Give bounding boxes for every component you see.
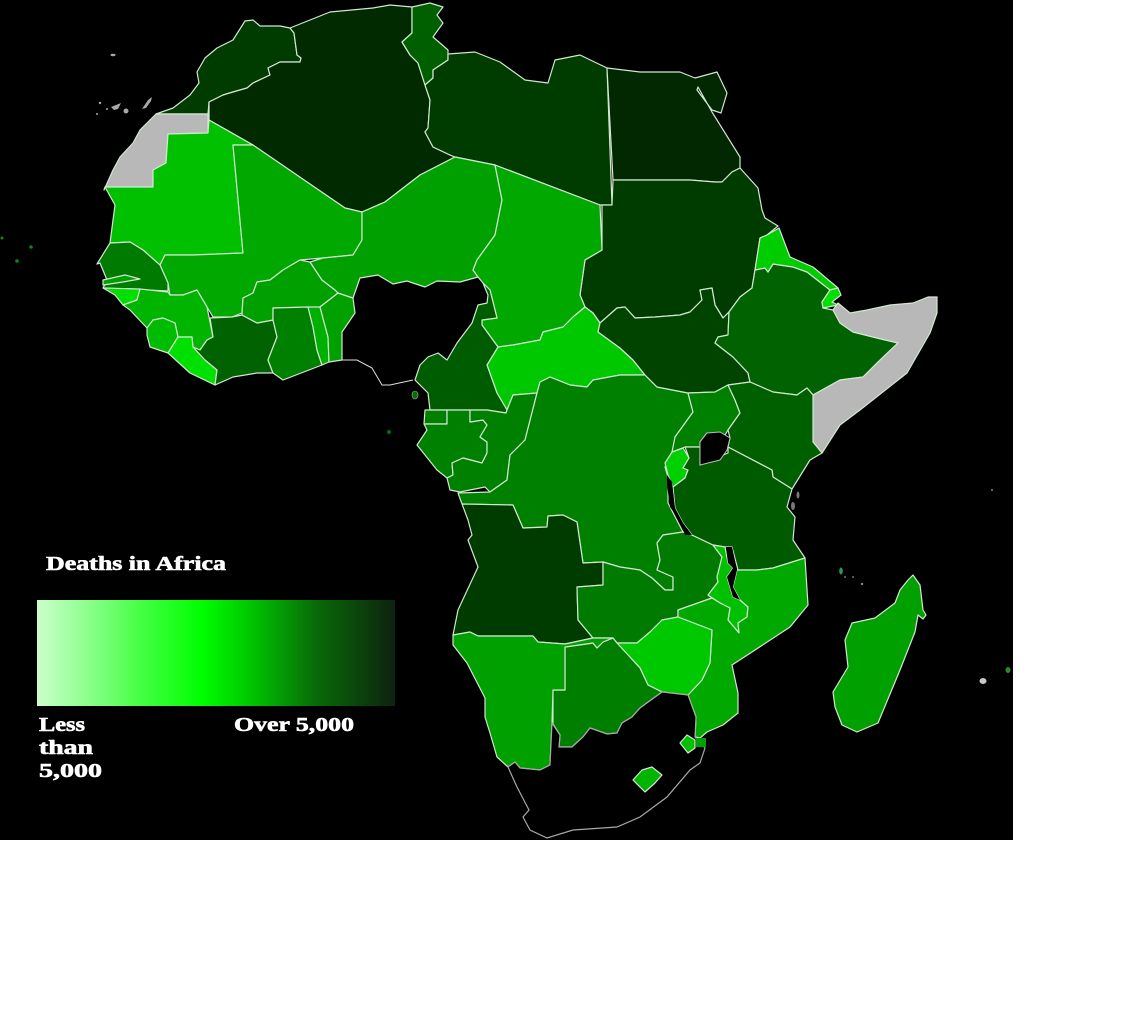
- legend: [37, 553, 395, 782]
- islands: [0, 54, 1010, 684]
- country: Guinea-Bissau: [103, 288, 140, 305]
- country: Lesotho: [633, 767, 662, 792]
- country: Namibia: [453, 632, 613, 770]
- territory: Western Sahara: [104, 114, 208, 190]
- country: Eritrea: [755, 228, 838, 290]
- legend high label: Over 5,000: [234, 714, 354, 736]
- legend low label: 5,000: [39, 760, 102, 782]
- country: Guinea: [123, 289, 213, 350]
- country: Botswana: [553, 638, 662, 747]
- country: South Sudan: [598, 288, 750, 393]
- country: Togo: [308, 307, 329, 365]
- country: Mali: [160, 145, 362, 317]
- country: Morocco: [156, 20, 301, 114]
- country: Senegal: [97, 242, 168, 291]
- country: Uganda: [672, 385, 740, 452]
- country: Sierra Leone: [147, 318, 178, 353]
- country: Swaziland: [680, 735, 695, 753]
- country: Central African Republic: [487, 307, 645, 410]
- country: Cote d'Ivoire: [193, 315, 277, 385]
- country: Somalia: [813, 297, 937, 453]
- country: Cameroon: [415, 283, 507, 413]
- legend title: Deaths in Africa: [46, 553, 226, 575]
- black background panel: [0, 0, 1013, 840]
- country: Niger: [310, 157, 502, 298]
- legend low label: than: [39, 737, 93, 759]
- country: Egypt: [607, 68, 740, 182]
- legend gradient bar: [37, 600, 395, 706]
- country: Sudan: [580, 168, 778, 323]
- country: South Africa: [508, 692, 705, 838]
- country: Republic of the Congo: [447, 393, 537, 492]
- country: Malawi: [708, 545, 748, 633]
- country: Madagascar: [833, 575, 926, 732]
- lake: Victoria: [700, 432, 730, 465]
- country: Benin: [320, 293, 355, 362]
- country: Zambia: [577, 532, 722, 643]
- country: Tunisia: [402, 3, 448, 85]
- country: Equatorial Guinea: [424, 410, 447, 424]
- country: Liberia: [168, 337, 217, 385]
- country: Kenya: [728, 382, 822, 489]
- country: Algeria: [209, 5, 455, 212]
- country: Tanzania: [673, 447, 805, 570]
- country: Ghana: [268, 307, 322, 380]
- lake: Malawi: [726, 547, 740, 600]
- coast: Nigeria: [342, 360, 413, 385]
- country: Libya: [425, 52, 612, 205]
- country: Gabon: [417, 410, 487, 478]
- country: Chad: [473, 165, 602, 347]
- country: Mauritania: [105, 120, 253, 265]
- country: Djibouti: [822, 288, 841, 308]
- Mozambique southern tip: [696, 738, 706, 747]
- country: Gambia: [103, 275, 140, 285]
- country: Democratic Republic of the Congo: [458, 375, 693, 590]
- country: Angola: [453, 504, 603, 644]
- country: Zimbabwe: [617, 617, 712, 695]
- lake: Tanganyika: [667, 475, 692, 535]
- country: Burkina Faso: [242, 260, 338, 323]
- country: Ethiopia: [715, 264, 898, 395]
- legend low label: [39, 714, 102, 782]
- legend low label: Less: [39, 714, 85, 736]
- country: Rwanda and Burundi: [665, 448, 689, 487]
- country: Mozambique: [678, 558, 808, 738]
- map of Africa: [0, 3, 1010, 838]
